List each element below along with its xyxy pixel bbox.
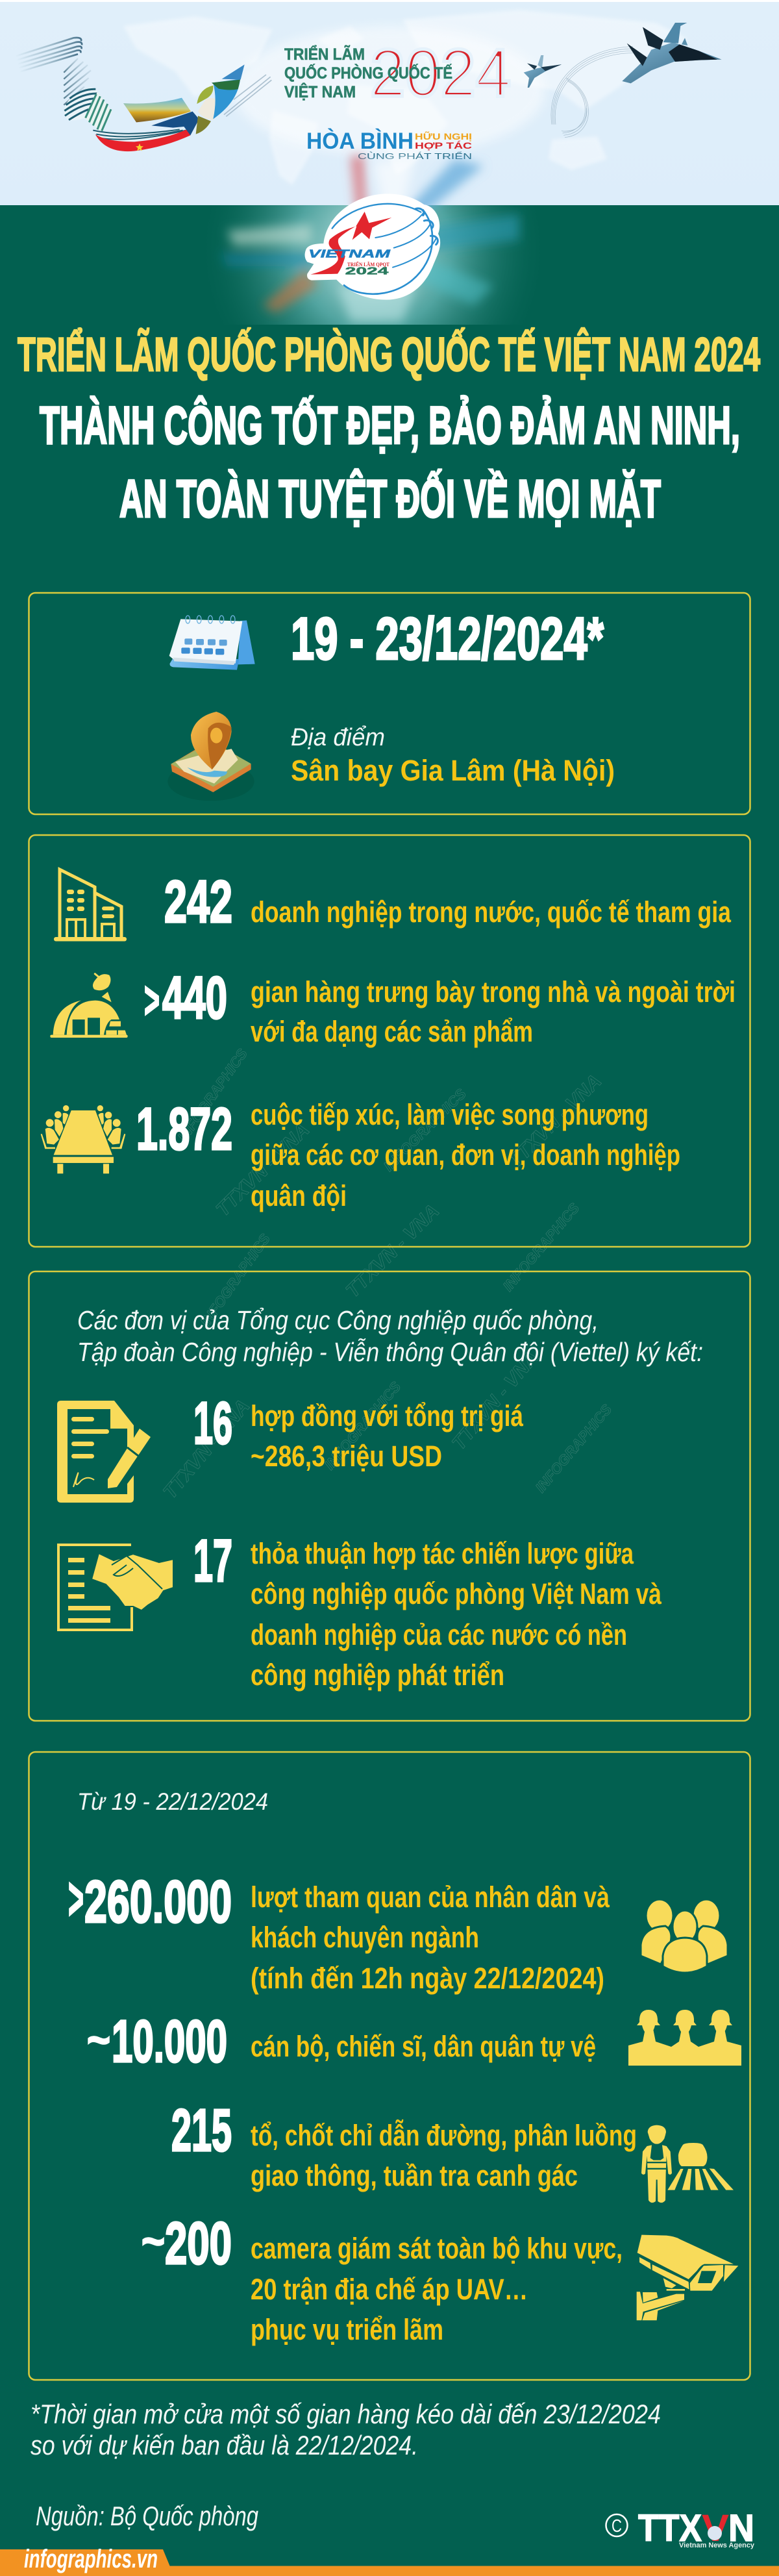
stat: >260.000 <box>68 1864 232 1935</box>
slogan: CÙNG PHÁT TRIỂN <box>358 151 472 161</box>
watermarks: INFOGRAPHICS <box>532 1401 615 1495</box>
stat: 16: 16 <box>193 1390 232 1457</box>
TTXVN logo: Vietnam News Agency <box>679 2542 755 2549</box>
text: cameras: phục vụ triển lãm <box>251 2313 443 2346</box>
TTXVN logo: TTX <box>638 2507 702 2549</box>
footer brand bar <box>0 2545 779 2576</box>
stat: >440 <box>144 965 227 1031</box>
title <box>18 328 760 529</box>
text: cooperation agreements <box>251 1537 662 1692</box>
event logo: VIETNAM <box>308 247 391 260</box>
text: cooperation agreements: công nghiệp quốc phòng Việt Nam và <box>251 1577 662 1610</box>
text: visitors: lượt tham quan của nhân dân và <box>251 1881 610 1914</box>
slogan: HÒA BÌNH <box>306 128 414 154</box>
footer brand bar: infographics.vn <box>24 2545 158 2573</box>
footnote: *Thời gian mở cửa một số gian hàng kéo dài đến 23/12/2024 <box>31 2399 661 2429</box>
icon: calendar <box>169 616 255 670</box>
exhibition wordmark: VIỆT NAM <box>284 82 356 101</box>
stat: ~200 <box>142 2210 232 2277</box>
venue label: Địa điểm <box>291 724 385 751</box>
event logo: 2024 <box>345 266 389 277</box>
watermarks: TTXVN - VNA <box>342 1200 443 1302</box>
logo burst glow <box>218 149 526 325</box>
panel: date and venue <box>29 593 750 814</box>
panel: visitors and security <box>29 1752 750 2380</box>
text: checkpoints: tổ, chốt chỉ dẫn đường, phân luồng <box>251 2119 637 2152</box>
footnote: so với dự kiến ban đầu là 22/12/2024. <box>31 2430 418 2460</box>
text: checkpoints <box>251 2119 637 2192</box>
stat: 242: 242 <box>164 869 232 935</box>
period label: Từ 19 - 22/12/2024 <box>77 1788 268 1815</box>
icon: soldiers <box>628 2010 741 2066</box>
watermarks: TTXVN - VNA <box>448 1347 543 1454</box>
stat: ~10.000: ~ <box>87 2014 110 2065</box>
watermarks: INFOGRAPHICS <box>500 1200 582 1294</box>
text: visitors: (tính đến 12h ngày 22/12/2024) <box>251 1962 604 1995</box>
text: meetings: quân đội <box>251 1179 347 1212</box>
TTXVN logo <box>606 2507 755 2549</box>
panel: signed agreements <box>29 1271 750 1721</box>
icon: contract <box>57 1401 151 1503</box>
watermarks <box>159 1045 615 1503</box>
stat: >440: > <box>144 971 160 1030</box>
icon: security camera <box>637 2235 738 2320</box>
stat: ~10.000 <box>87 2008 227 2075</box>
text: cooperation agreements: công nghiệp phát triển <box>251 1658 504 1692</box>
watermarks: INFOGRAPHICS <box>197 1231 273 1330</box>
exhibition wordmark: QUỐC PHÒNG QUỐC TẾ <box>284 63 452 82</box>
exhibition wordmark <box>284 36 511 111</box>
world map <box>123 10 688 185</box>
text: cooperation agreements: thỏa thuận hợp tác chiến lược giữa <box>251 1537 634 1570</box>
watermarks: INFOGRAPHICS <box>321 1379 404 1473</box>
text: booths: với đa dạng các sản phẩm <box>251 1015 533 1048</box>
text: cameras: camera giám sát toàn bộ khu vực, <box>251 2232 623 2265</box>
watermarks: INFOGRAPHICS <box>175 1045 251 1145</box>
date: 19 - 23/12/2024* <box>291 606 604 672</box>
text: visitors: khách chuyên ngành <box>251 1921 479 1954</box>
stat: ~200: 200 <box>165 2210 232 2277</box>
watermarks: TTXVN - VNA <box>159 1395 254 1503</box>
footnote <box>31 2399 661 2460</box>
icon: exhibition dome <box>50 973 128 1038</box>
text: contracts: hợp đồng với tổng trị giá <box>251 1399 524 1432</box>
text: meetings: cuộc tiếp xúc, làm việc song phương <box>251 1098 649 1131</box>
intro text: Tập đoàn Công nghiệp - Viễn thông Quân đội (Viettel) ký kết: <box>77 1337 703 1367</box>
text: checkpoints: giao thông, tuần tra canh gác <box>251 2159 578 2192</box>
TTXVN logo: N <box>728 2507 754 2549</box>
TTXVN logo: C <box>612 2516 622 2536</box>
fighter jets <box>524 23 722 138</box>
white glow behind title <box>234 26 545 156</box>
stat: 215: 215 <box>171 2097 232 2164</box>
source: Nguồn: Bộ Quốc phòng <box>36 2501 258 2531</box>
stat: >260.000: > <box>68 1864 84 1933</box>
icon: traffic guard <box>641 2125 734 2203</box>
exhibition wordmark: TRIỂN LÃM <box>284 44 365 64</box>
text: visitors <box>251 1881 610 1995</box>
icon: handshake <box>58 1545 173 1630</box>
slogan: HỮU NGHỊ <box>415 131 472 142</box>
text: booths <box>251 975 736 1048</box>
ribbon emblem <box>15 38 271 151</box>
text: contracts <box>251 1399 524 1473</box>
icon: buildings <box>54 869 127 942</box>
slogan <box>306 128 472 161</box>
flag band <box>95 129 190 151</box>
stat: 1.872: 1.872 <box>136 1096 232 1162</box>
event logo <box>305 194 440 300</box>
stat: >260.000: 260.000 <box>84 1869 232 1935</box>
text: meetings <box>251 1098 680 1212</box>
stat: >440: 440 <box>162 965 227 1031</box>
venue: Sân bay Gia Lâm (Hà Nội) <box>291 754 615 787</box>
text: personnel: cán bộ, chiến sĩ, dân quân tự vệ <box>251 2030 596 2063</box>
text: cooperation agreements: doanh nghiệp của các nước có nền <box>251 1618 627 1651</box>
icon: map pin <box>167 712 254 801</box>
text: contracts: ~286,3 triệu USD <box>251 1440 442 1473</box>
text: cameras <box>251 2232 623 2346</box>
text: cameras: 20 trận địa chế áp UAV… <box>251 2273 528 2306</box>
icon: group of people <box>641 1899 728 1973</box>
watermarks: TTXVN - VNA <box>212 1119 314 1221</box>
watermarks: TTXVN - VNA <box>504 1070 606 1172</box>
intro text <box>77 1305 703 1367</box>
stat: ~10.000: 10.000 <box>112 2008 227 2075</box>
header banner <box>0 0 779 205</box>
icon: meeting table <box>41 1105 125 1173</box>
panel: participation figures <box>29 835 750 1247</box>
exhibition wordmark: 2024 <box>370 36 511 111</box>
event logo: TRIỂN LÃM QPQT <box>347 261 390 268</box>
stat: 17: 17 <box>193 1528 232 1594</box>
watermarks: INFOGRAPHICS <box>380 1085 469 1175</box>
stat: ~200: ~ <box>142 2216 165 2266</box>
TTXVN logo: V <box>702 2507 729 2549</box>
intro text: Các đơn vị của Tổng cục Công nghiệp quốc phòng, <box>77 1305 599 1335</box>
slogan: HỢP TÁC <box>415 140 472 151</box>
